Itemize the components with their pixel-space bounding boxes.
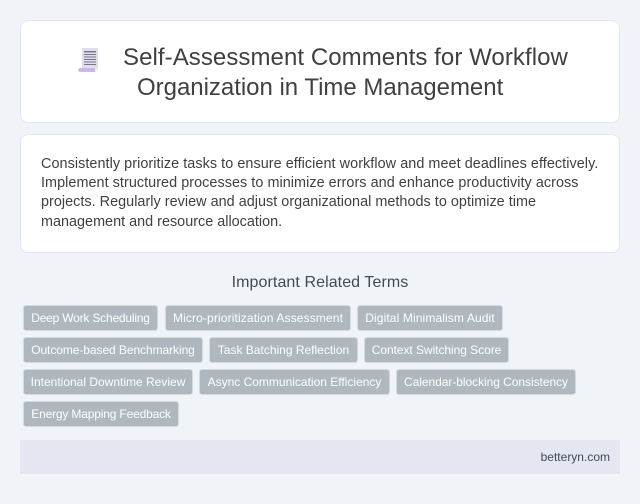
title: Self-Assessment Comments for Workflow bbox=[123, 44, 568, 71]
summary text: Consistently prioritize tasks to ensure efficient workflow and meet deadlines effectively. bbox=[41, 156, 598, 172]
tag bbox=[165, 305, 351, 331]
tag: Intentional Downtime Review bbox=[31, 375, 185, 389]
summary text bbox=[41, 156, 598, 230]
tag bbox=[23, 337, 203, 363]
tag bbox=[364, 337, 509, 363]
tag: Task Batching Reflection bbox=[218, 343, 349, 357]
tag: Context Switching Score bbox=[372, 343, 501, 357]
tag bbox=[357, 305, 503, 331]
header panel bbox=[20, 20, 620, 123]
summary text: management and resource allocation. bbox=[41, 214, 282, 230]
footer source text: betteryn.com bbox=[541, 450, 610, 464]
tag bbox=[23, 401, 179, 427]
tag bbox=[209, 337, 358, 363]
icon: document scroll bbox=[78, 48, 98, 72]
tag: Deep Work Scheduling bbox=[31, 311, 150, 325]
tag bbox=[396, 369, 576, 395]
tag: Energy Mapping Feedback bbox=[31, 407, 171, 421]
summary text: projects. Regularly review and adjust organizational methods to optimize time bbox=[41, 194, 536, 210]
tag: Async Communication Efficiency bbox=[208, 375, 381, 389]
tag: Outcome-based Benchmarking bbox=[31, 343, 195, 357]
tag bbox=[23, 369, 193, 395]
tag bbox=[199, 369, 390, 395]
related terms heading: Important Related Terms bbox=[232, 274, 408, 291]
related terms tags bbox=[23, 305, 576, 427]
footer bar bbox=[20, 440, 620, 474]
tag: Digital Minimalism Audit bbox=[365, 311, 495, 325]
tag: Calendar-blocking Consistency bbox=[404, 375, 568, 389]
tag: Micro-prioritization Assessment bbox=[173, 311, 343, 325]
summary panel bbox=[20, 134, 620, 253]
title bbox=[123, 44, 568, 101]
title: Organization in Time Management bbox=[137, 74, 503, 101]
tag bbox=[23, 305, 158, 331]
summary text: Implement structured processes to minimize errors and enhance productivity across bbox=[41, 175, 579, 191]
